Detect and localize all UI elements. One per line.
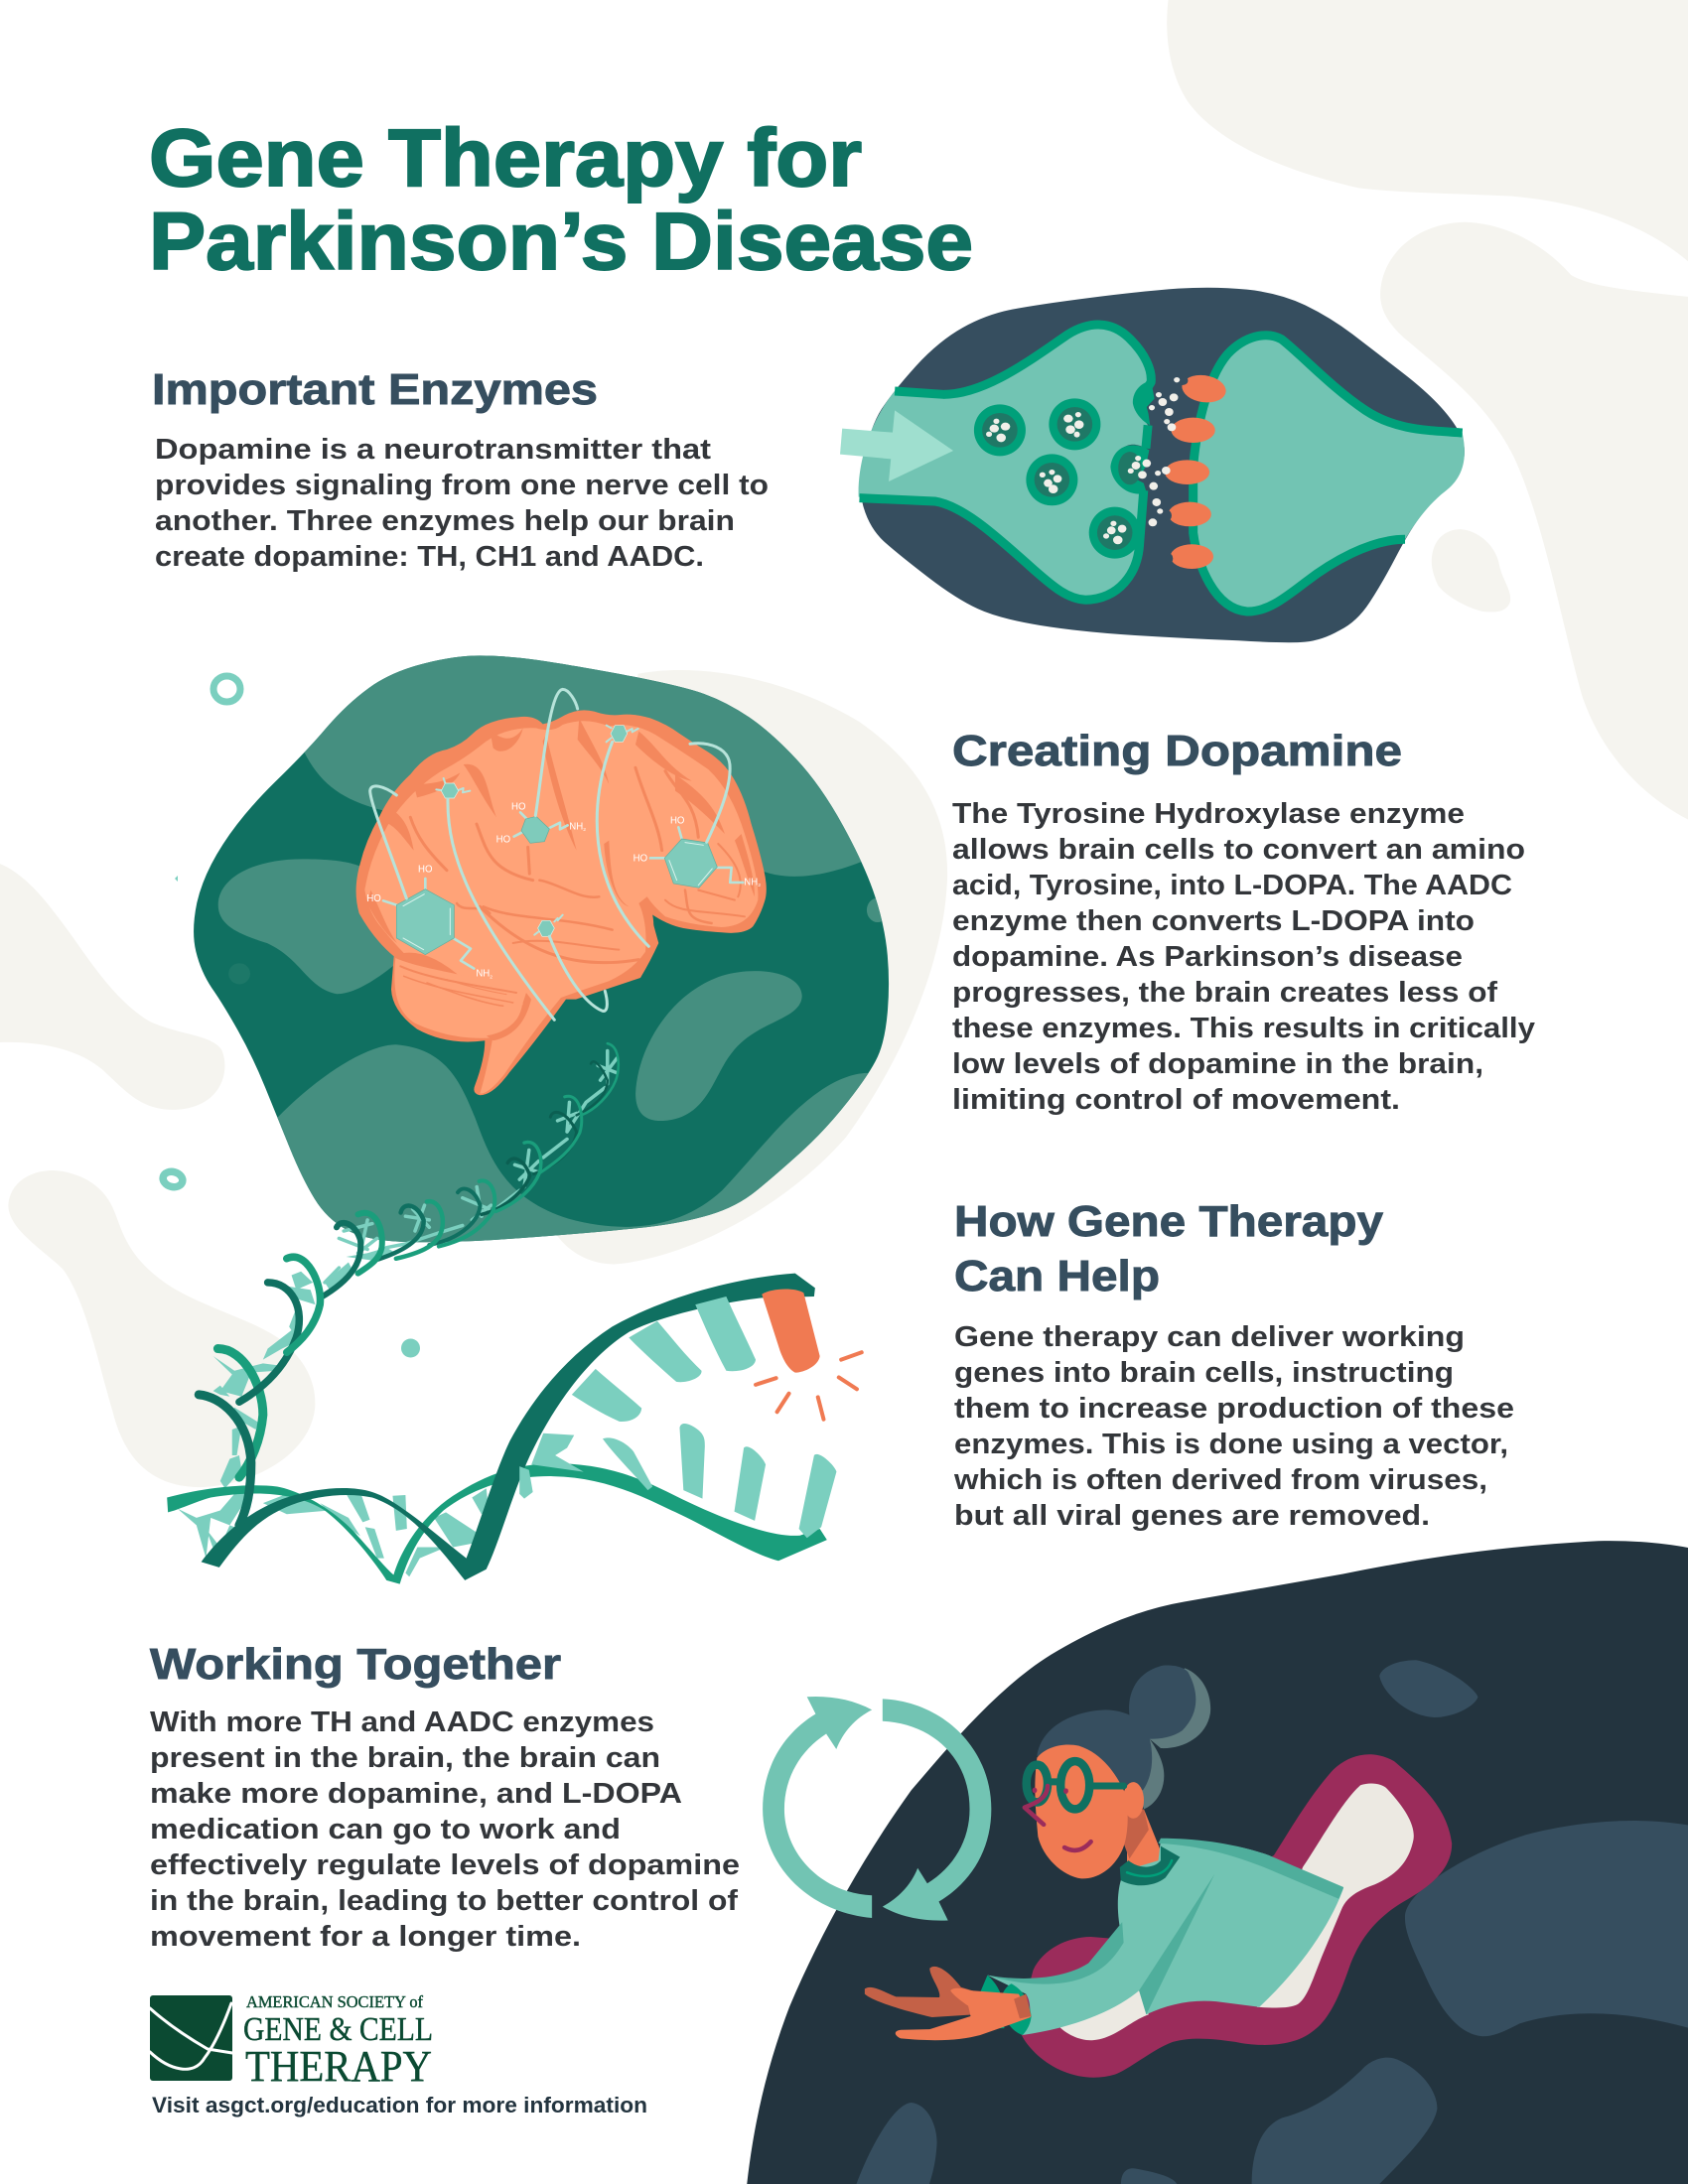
heading: how gene therapy can help: How Gene Therapy bbox=[954, 1197, 1384, 1246]
hair bbox=[1037, 1665, 1196, 1790]
molecule: right hexagon: NH bbox=[744, 877, 758, 887]
molecule: right hexagon: HO bbox=[670, 816, 685, 827]
text block: how gene therapy can help: genes into brain cells, instructing bbox=[954, 1357, 1454, 1389]
brain inner shape bbox=[364, 721, 758, 1094]
text block: working together bbox=[150, 1706, 740, 1953]
text block: important enzymes bbox=[155, 434, 769, 573]
sweater bbox=[987, 1840, 1343, 2035]
heading: working together: Working Together bbox=[150, 1640, 561, 1689]
molecule: large left hexagon: 2 bbox=[490, 974, 492, 980]
cuffs bbox=[980, 1976, 1004, 2028]
synapse dark background bbox=[861, 288, 1465, 642]
green brain background bbox=[194, 655, 890, 1243]
left neuron bbox=[859, 325, 1155, 600]
title bbox=[149, 113, 973, 287]
text block: creating dopamine: these enzymes. This results in critically bbox=[952, 1013, 1535, 1044]
dark coil strands bbox=[239, 1061, 608, 1402]
text block: creating dopamine: The Tyrosine Hydroxylase enzyme bbox=[952, 798, 1465, 830]
brain outer shape bbox=[356, 710, 767, 1095]
heading: how gene therapy can help: Can Help bbox=[954, 1252, 1160, 1300]
text block: how gene therapy can help: them to increase production of these bbox=[954, 1393, 1514, 1425]
thick brain folds bbox=[367, 718, 755, 1040]
text block: creating dopamine: low levels of dopamine in the brain, bbox=[952, 1048, 1483, 1080]
light coil strands bbox=[287, 1043, 619, 1352]
heading: creating dopamine: Creating Dopamine bbox=[952, 727, 1402, 775]
icon: cycle arrows bbox=[763, 1697, 991, 1921]
DNA dark strand: lower bbox=[199, 1274, 815, 1580]
text block: creating dopamine: allows brain cells to convert an amino bbox=[952, 834, 1525, 866]
section: creating dopamine bbox=[952, 727, 1535, 1116]
back hand bbox=[865, 1967, 995, 2017]
text block: working together: effectively regulate levels of dopamine bbox=[150, 1849, 740, 1881]
logo mark bbox=[150, 1995, 232, 2081]
text block: important enzymes: provides signaling from one nerve cell to bbox=[155, 470, 769, 501]
molecule: center hexagon: HO bbox=[511, 802, 526, 813]
illustration: brain and molecules bbox=[161, 635, 949, 1358]
text block: working together: medication can go to work and bbox=[150, 1814, 621, 1845]
molecule: right hexagon: HO bbox=[633, 853, 648, 864]
hair bun shade bbox=[1137, 1668, 1210, 1809]
text block: how gene therapy can help: enzymes. This is done using a vector, bbox=[954, 1429, 1508, 1460]
illustration: synapse bbox=[840, 288, 1465, 642]
text block: creating dopamine: dopamine. As Parkinson’s disease bbox=[952, 941, 1463, 973]
illustration: DNA helix bbox=[167, 1043, 862, 1584]
glasses bbox=[1027, 1761, 1124, 1809]
text block: working together: With more TH and AADC enzymes bbox=[150, 1706, 654, 1738]
logo text: AMERICAN SOCIETY of bbox=[246, 1992, 423, 2011]
title: Gene Therapy for bbox=[149, 113, 862, 204]
text block: working together: present in the brain, the brain can bbox=[150, 1742, 660, 1774]
front hand bbox=[896, 1988, 1031, 2040]
DNA light strand: lower bbox=[167, 1349, 827, 1584]
decorative ring: lower bbox=[161, 1169, 185, 1189]
background blob: small right bbox=[1432, 529, 1510, 612]
face bbox=[1035, 1745, 1128, 1878]
section: how gene therapy can help bbox=[953, 1197, 1514, 1532]
molecule: large left hexagon: HO bbox=[366, 893, 381, 904]
text block: creating dopamine: progresses, the brain creates less of bbox=[952, 977, 1497, 1009]
chair bbox=[1019, 1754, 1452, 2078]
arrow: signal direction bbox=[840, 410, 953, 481]
brain fold lines bbox=[400, 767, 745, 1006]
logo: American Society of Gene & Cell Therapy bbox=[150, 1992, 433, 2091]
ear bbox=[1123, 1782, 1144, 1819]
DNA bases: upper ladder bbox=[519, 1297, 836, 1538]
smile bbox=[1064, 1842, 1091, 1850]
decorative speck bbox=[175, 876, 178, 882]
DNA upper coils bbox=[239, 1043, 619, 1402]
text block: important enzymes: Dopamine is a neurotransmitter that bbox=[155, 434, 711, 466]
text block: working together: make more dopamine, and L-DOPA bbox=[150, 1778, 682, 1810]
molecule: large left hexagon: NH bbox=[476, 969, 490, 980]
molecule: right hexagon bbox=[633, 816, 761, 888]
section: working together bbox=[150, 1640, 740, 1953]
section: important enzymes bbox=[152, 365, 769, 573]
nose and eyes bbox=[1025, 1786, 1068, 1825]
background blob: left upper bbox=[0, 864, 224, 1110]
background blob: behind brain bbox=[554, 670, 947, 1265]
text block: how gene therapy can help bbox=[953, 1321, 1514, 1532]
text block: creating dopamine: enzyme then converts L-DOPA into bbox=[952, 905, 1475, 937]
DNA faulty base bbox=[762, 1290, 820, 1373]
footer link text: Visit asgct.org/education for more information bbox=[152, 2093, 647, 2117]
text block: important enzymes: another. Three enzymes help our brain bbox=[155, 505, 735, 537]
title: Parkinson’s Disease bbox=[149, 197, 973, 287]
text block: how gene therapy can help: Gene therapy can deliver working bbox=[954, 1321, 1465, 1353]
decorative dot bbox=[401, 1338, 420, 1358]
vesicles bbox=[974, 398, 1141, 559]
brain bbox=[356, 689, 767, 1095]
molecule: center hexagon: 2 bbox=[583, 827, 586, 833]
molecule: center hexagon: NH bbox=[569, 821, 583, 832]
text block: how gene therapy can help: but all viral genes are removed. bbox=[954, 1500, 1430, 1532]
decorative ring: top bbox=[213, 676, 240, 702]
receptors bbox=[1163, 371, 1230, 569]
background blob: top right bbox=[1167, 0, 1688, 261]
text block: how gene therapy can help: which is often derived from viruses, bbox=[953, 1464, 1487, 1496]
molecule: large left hexagon: HO bbox=[418, 865, 433, 876]
logo text: THERAPY bbox=[245, 2042, 432, 2091]
background blob: left lower bbox=[8, 1170, 315, 1487]
text block: creating dopamine bbox=[952, 798, 1535, 1116]
heading: important enzymes: Important Enzymes bbox=[152, 365, 598, 414]
text block: creating dopamine: acid, Tyrosine, into L-DOPA. The AADC bbox=[952, 870, 1512, 901]
sweater shading bbox=[1159, 1839, 1343, 1899]
molecule: right hexagon: 2 bbox=[758, 883, 761, 888]
collar bbox=[1120, 1846, 1180, 1885]
text block: important enzymes: create dopamine: TH, CH1 and AADC. bbox=[155, 541, 704, 573]
text block: working together: movement for a longer time. bbox=[150, 1921, 581, 1953]
DNA bases: lower lattice bbox=[178, 1248, 489, 1576]
molecule: center hexagon bbox=[496, 802, 586, 845]
molecule: large left hexagon bbox=[366, 865, 492, 980]
woman figure bbox=[865, 1665, 1343, 2040]
logo text: GENE & CELL bbox=[243, 2011, 433, 2048]
neck bbox=[1127, 1809, 1165, 1869]
coil bases bbox=[325, 1051, 617, 1283]
illustration: woman on chair with cycle arrows bbox=[763, 1665, 1452, 2078]
logo text bbox=[243, 1992, 433, 2091]
neurotransmitter dots bbox=[1128, 377, 1180, 526]
molecule: small hexagons bbox=[436, 726, 638, 936]
bottom dark panel bbox=[747, 1541, 1688, 2184]
orbit lines bbox=[370, 689, 730, 1020]
heading: how gene therapy can help bbox=[954, 1197, 1384, 1300]
break rays bbox=[756, 1352, 862, 1420]
right neuron bbox=[1194, 336, 1465, 612]
cerebellum bbox=[394, 958, 523, 1038]
background blob: right side bbox=[1380, 222, 1688, 819]
text block: working together: in the brain, leading to better control of bbox=[150, 1885, 738, 1917]
text block: creating dopamine: limiting control of movement. bbox=[952, 1084, 1400, 1116]
molecule: center hexagon: HO bbox=[496, 834, 511, 845]
